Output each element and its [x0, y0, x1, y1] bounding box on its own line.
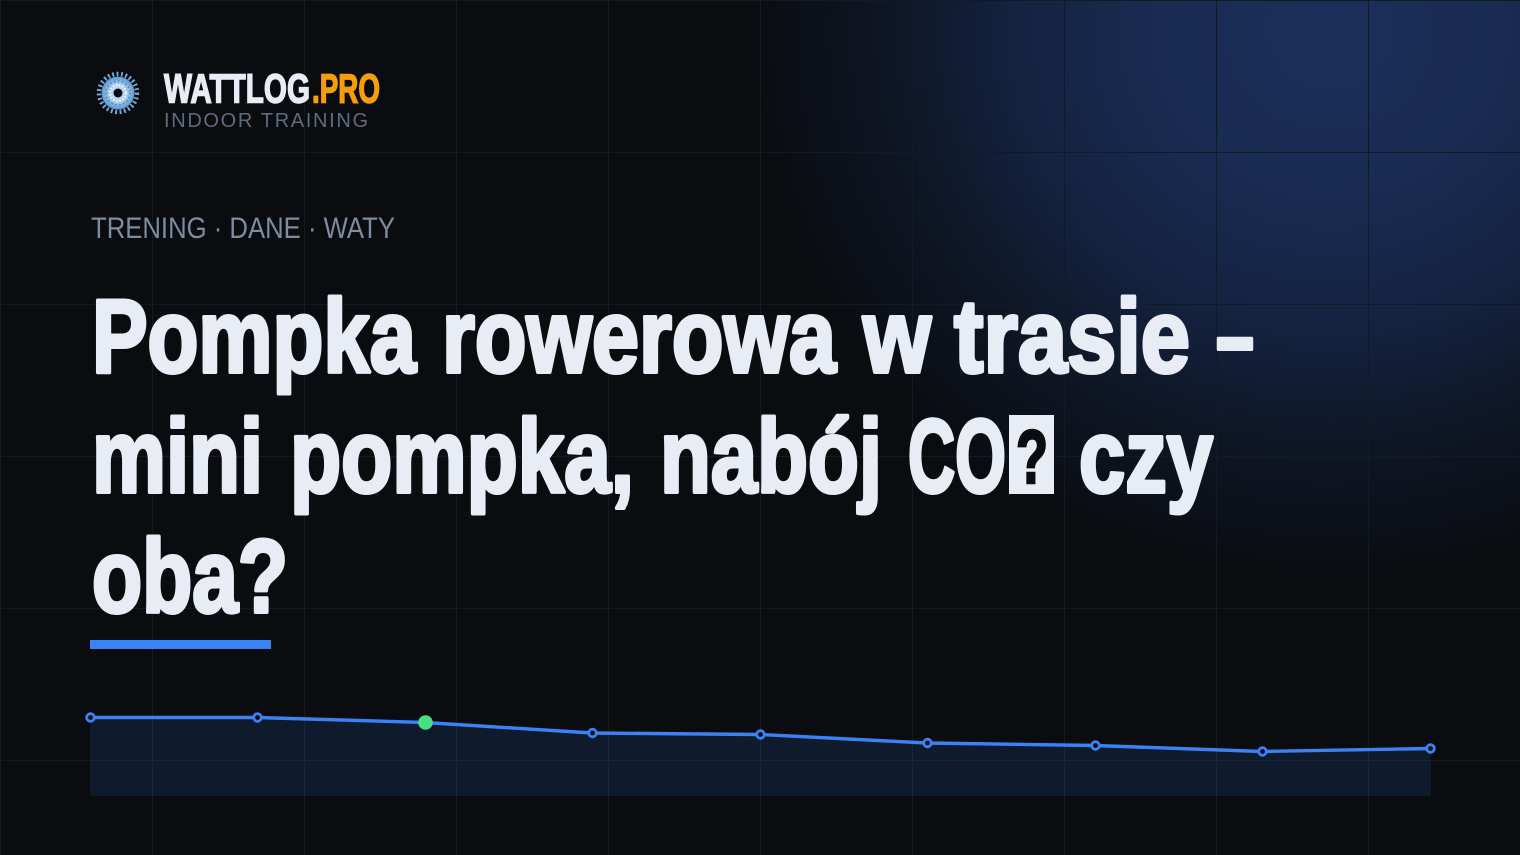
chart line: [90, 718, 1430, 752]
title: [92, 279, 1254, 635]
icon: cassette sprocket: [99, 74, 137, 112]
eyebrow text: TRENING · DANE · WATY: [91, 212, 395, 245]
wordmark: .PRO: [312, 66, 380, 112]
highlighted data point: [418, 715, 433, 730]
title: rowerowa: [442, 279, 837, 395]
logo: brand lockup: [99, 66, 380, 132]
title: w: [862, 279, 932, 395]
title: CO: [908, 399, 1006, 515]
title: trasie: [954, 279, 1190, 395]
title: oba?: [92, 519, 288, 635]
chart area fill: [90, 718, 1431, 796]
title: Pompka: [92, 279, 417, 395]
title: mini: [92, 399, 263, 515]
title: ?: [1016, 415, 1048, 500]
title: nabój: [660, 399, 882, 515]
wordmark: WATTLOG: [164, 66, 310, 112]
tagline: INDOOR TRAINING: [164, 110, 368, 132]
title: pompka,: [290, 399, 634, 515]
line chart: [87, 714, 1434, 796]
title underline accent: [90, 640, 271, 649]
data markers: [87, 714, 1434, 755]
title: –: [1216, 279, 1254, 395]
title: czy: [1079, 399, 1213, 515]
